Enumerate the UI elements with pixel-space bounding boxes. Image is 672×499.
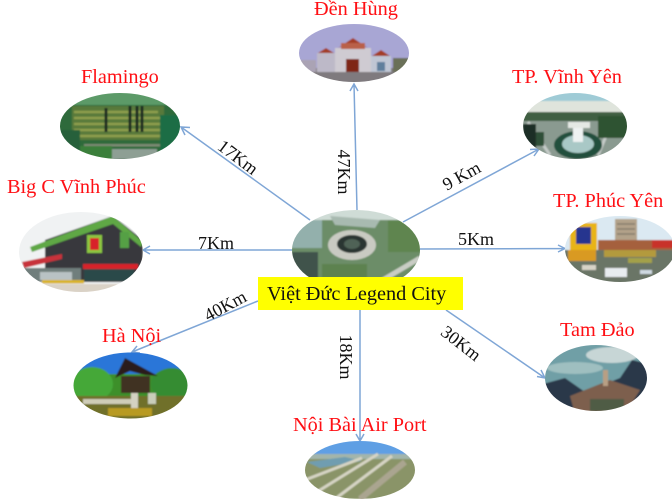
distance: 30Km: 30Km — [437, 322, 485, 365]
photo: Big C Vĩnh Phúc — [17, 210, 145, 294]
photo: Nội Bài Air Port — [303, 439, 417, 499]
heading: TP. Phúc Yên: TP. Phúc Yên — [553, 190, 663, 212]
distance: 7Km: 7Km — [198, 233, 234, 253]
photo: TP. Phúc Yên — [563, 214, 672, 284]
distance: 5Km: 5Km — [458, 229, 494, 249]
photo: Việt Đức Legend City project — [292, 210, 420, 277]
arrow: to Tam Đảo — [446, 310, 545, 378]
distance: 17Km: 17Km — [214, 136, 262, 179]
heading: Nội Bài Air Port: Nội Bài Air Port — [293, 414, 427, 436]
photo: Flamingo — [58, 91, 182, 161]
heading: TP. Vĩnh Yên: TP. Vĩnh Yên — [512, 66, 622, 88]
arrow: to Hà Nội — [132, 301, 258, 353]
distance: 9 Km: 9 Km — [439, 157, 484, 194]
arrow: to Đền Hùng — [350, 84, 358, 210]
central label: Việt Đức Legend City: Việt Đức Legend City — [267, 283, 447, 305]
arrow: to TP. Phúc Yên — [420, 245, 565, 252]
photo: Đền Hùng — [297, 23, 411, 85]
arrow: to Flamingo — [181, 127, 310, 220]
heading: Hà Nội: Hà Nội — [102, 325, 162, 347]
photo: Hà Nội — [74, 352, 188, 418]
distance: 18Km: 18Km — [336, 334, 356, 380]
arrow: to Nội Bài Air Port — [356, 310, 364, 441]
central label: Việt Đức Legend City — [258, 277, 463, 310]
arrow: to TP. Vĩnh Yên — [403, 149, 539, 222]
distance: 40Km: 40Km — [201, 286, 250, 325]
heading: Tam Đảo: Tam Đảo — [560, 319, 635, 341]
arrow: to Big C Vĩnh Phúc — [143, 246, 292, 254]
distance: 47Km: 47Km — [334, 150, 354, 194]
photo: Tam Đảo — [543, 344, 649, 414]
photo: TP. Vĩnh Yên — [521, 91, 629, 161]
heading: Flamingo: Flamingo — [81, 66, 159, 88]
heading: Big C Vĩnh Phúc: Big C Vĩnh Phúc — [7, 176, 146, 198]
